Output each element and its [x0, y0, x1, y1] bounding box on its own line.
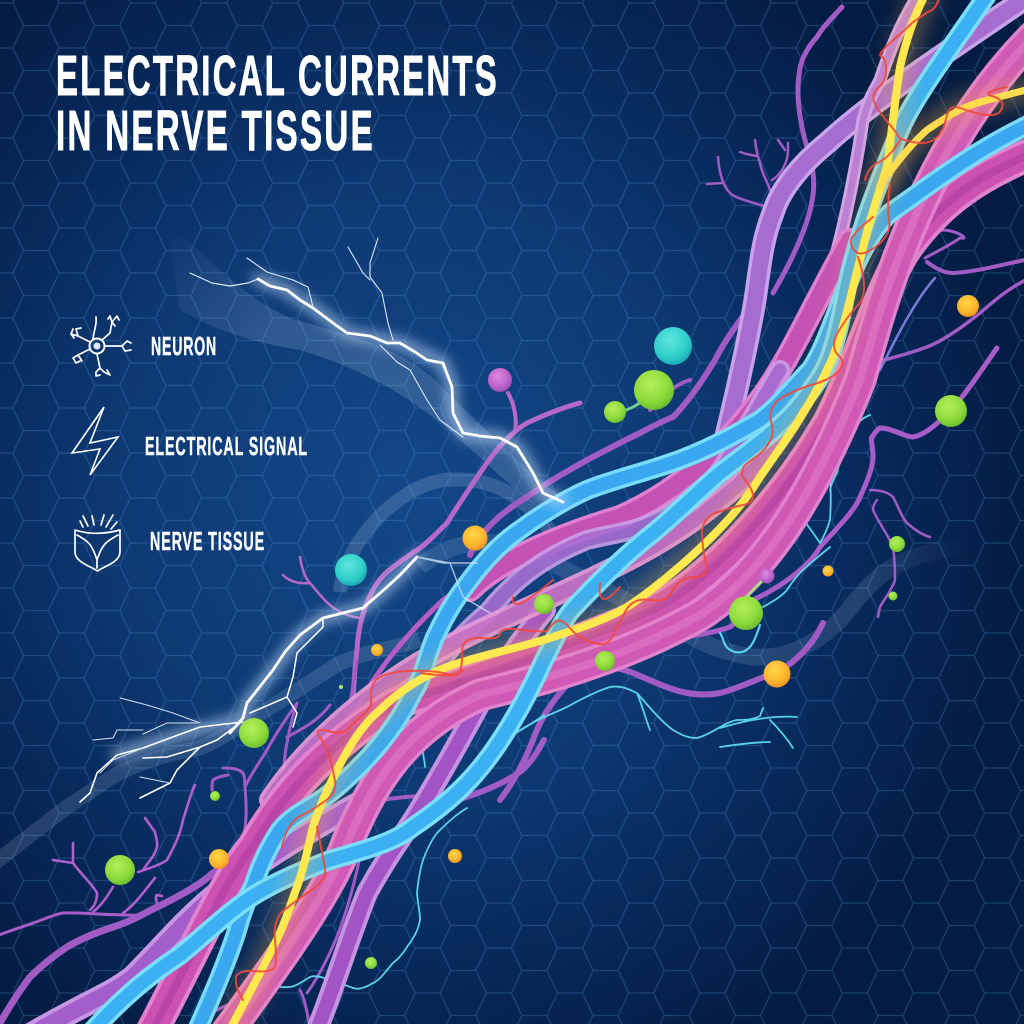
title	[56, 44, 499, 163]
particle: teal	[335, 554, 367, 586]
fibre: blue	[197, 124, 1024, 1024]
title: IN NERVE TISSUE	[56, 99, 375, 163]
fibre: pink main	[150, 152, 1024, 1024]
particle: green	[365, 957, 377, 969]
ball stems	[620, 390, 765, 600]
particle: green	[889, 536, 905, 552]
fibre: purple lower	[315, 610, 545, 1024]
particle: purple	[488, 368, 512, 392]
fibre: lavender centre	[415, 370, 780, 695]
particle: green	[239, 718, 269, 748]
red action-potential traces	[236, 0, 1007, 1000]
particle: orange	[462, 526, 488, 550]
fibre: lavender	[725, 0, 1024, 440]
legend	[71, 316, 308, 571]
cyan nerve branches	[237, 415, 870, 1000]
particle: green	[888, 592, 898, 600]
particle: orange	[957, 295, 979, 317]
particle: green	[935, 395, 967, 427]
particle: teal	[654, 327, 692, 365]
particle: orange	[822, 566, 834, 576]
lightning: upper bolt	[190, 238, 563, 502]
particle: green	[634, 370, 674, 410]
icon: nerve tissue	[75, 515, 120, 571]
particle: green	[729, 596, 763, 630]
label: neuron: NEURON	[151, 331, 217, 361]
particle: purple	[760, 568, 774, 584]
title: ELECTRICAL CURRENTS	[56, 44, 499, 108]
particle: orange	[209, 849, 229, 869]
fibre: pale pink	[270, 330, 835, 800]
translucent ribbons	[0, 222, 968, 862]
fibre: pale lavender	[825, 0, 920, 290]
particles	[105, 295, 979, 969]
particle: orange	[764, 660, 790, 688]
particle: tiny green	[339, 685, 343, 689]
glow behind yellow current	[230, 0, 1024, 1024]
fibre: lavender lower	[25, 800, 365, 1024]
fibre: pink second	[225, 35, 1024, 1024]
particle: green	[595, 651, 615, 671]
fibre: yellow current	[230, 0, 1024, 1024]
particle: green	[534, 594, 554, 614]
label: nerve tissue: NERVE TISSUE	[150, 526, 265, 556]
particle: green	[105, 855, 135, 885]
particle: orange	[448, 849, 462, 863]
particle: green	[210, 791, 220, 801]
fibre: magenta	[470, 240, 850, 590]
icon: electrical signal	[72, 407, 118, 475]
icon: neuron	[71, 316, 131, 376]
particle: orange	[371, 644, 383, 656]
particle: green	[604, 401, 626, 423]
label: electrical signal: ELECTRICAL SIGNAL	[145, 431, 308, 461]
lightning: lower bolt	[80, 557, 490, 802]
